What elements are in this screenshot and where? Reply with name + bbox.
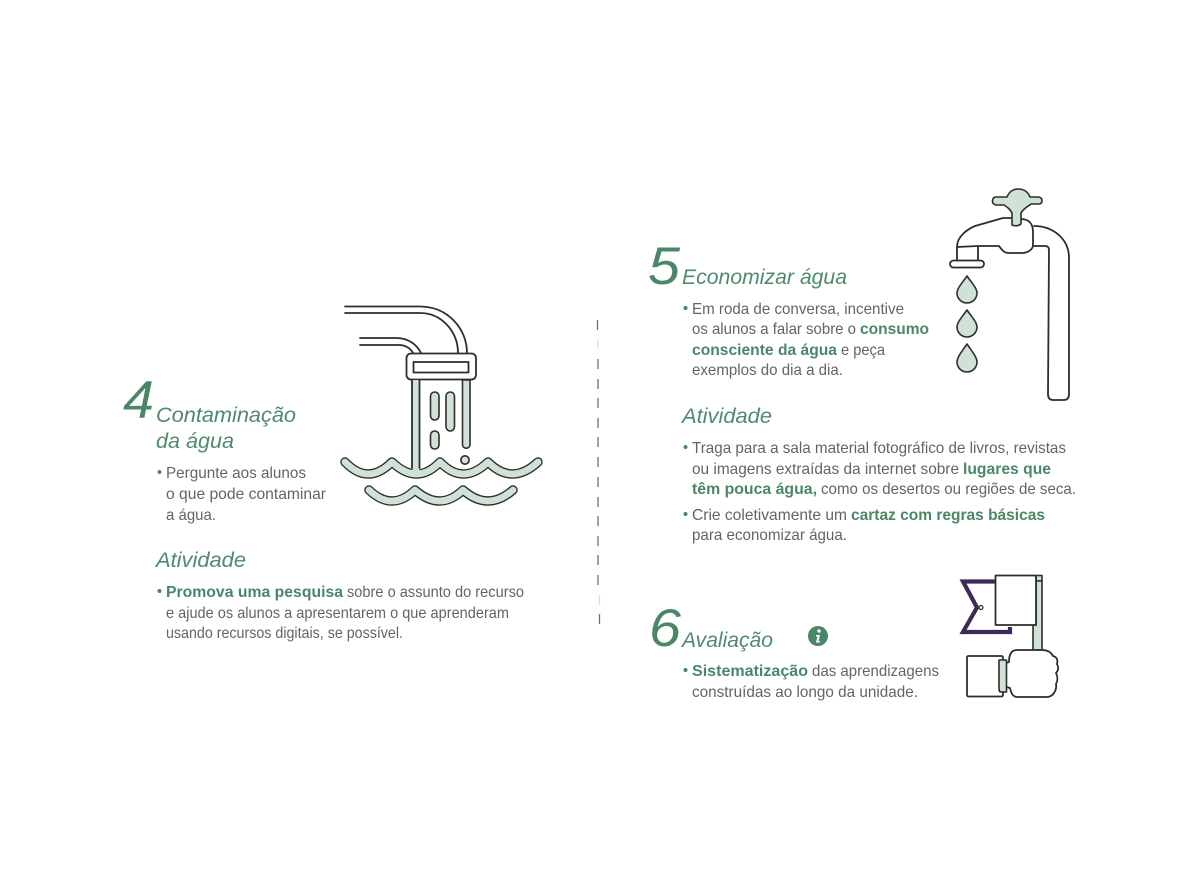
panel: section 4 water contamination: [123, 306, 538, 642]
panel: section 6 evaluation: [649, 576, 1058, 701]
text block: activity bullets: como os desertos ou regiões de seca.: [821, 481, 1076, 498]
text block: discussion bullet: consumo: [860, 321, 929, 338]
text block: activity bullets: Traga para a sala material fotográfico de livros, revistas: [692, 440, 1066, 457]
text block: discussion bullet: [684, 301, 929, 379]
text block: question bullet: a água.: [166, 507, 216, 524]
text block: activity bullet: usando recursos digitais, se possível.: [166, 625, 403, 642]
text block: discussion bullet: consciente da água: [692, 342, 837, 359]
icon: information: [808, 626, 828, 646]
text block: activity bullets: cartaz com regras básicas: [851, 507, 1045, 524]
heading: Atividade: Atividade: [154, 549, 246, 572]
heading: Contaminação da água: Contaminação: [156, 404, 296, 427]
text block: question bullet: o que pode contaminar: [166, 486, 327, 503]
text block: question bullet: [158, 465, 327, 524]
text block: activity bullets: para economizar água.: [692, 527, 847, 544]
text block: activity bullet: sobre o assunto do recurso: [347, 584, 524, 601]
text block: activity bullet: e ajude os alunos a apresentarem o que aprenderam: [166, 605, 509, 622]
number 6: 6: [649, 599, 682, 658]
text block: activity bullets: [684, 440, 1076, 544]
text block: activity bullet: [158, 584, 524, 642]
heading: Atividade: Atividade: [680, 405, 772, 428]
text block: discussion bullet: Em roda de conversa, incentive: [692, 301, 904, 318]
heading: Avaliação: Avaliação: [680, 629, 773, 652]
icon: hand holding flag: [963, 576, 1058, 697]
text block: activity bullet: Promova uma pesquisa: [166, 584, 343, 601]
text block: evaluation bullet: das aprendizagens: [812, 663, 939, 680]
text block: activity bullets: lugares que: [963, 461, 1051, 478]
text block: discussion bullet: e peça: [841, 342, 885, 359]
panel: section 5 saving water: [648, 189, 1076, 544]
number 4: 4: [123, 371, 154, 430]
icon: dripping faucet: [950, 189, 1069, 400]
icon: sewage pipe over water: [345, 306, 538, 501]
text block: activity bullets: ou imagens extraídas da internet sobre: [692, 461, 959, 478]
heading: Contaminação da água: da água: [156, 430, 234, 453]
heading: Economizar água: Economizar água: [682, 266, 847, 289]
text block: evaluation bullet: construídas ao longo da unidade.: [692, 684, 918, 701]
text block: evaluation bullet: [684, 663, 939, 701]
vertical dashed divider: [598, 320, 600, 624]
text block: activity bullets: Crie coletivamente um: [692, 507, 847, 524]
text block: discussion bullet: os alunos a falar sobre o: [692, 321, 856, 338]
heading: Contaminação da água: [156, 404, 296, 453]
text block: evaluation bullet: Sistematização: [692, 663, 808, 680]
number 5: 5: [648, 237, 681, 296]
text block: discussion bullet: exemplos do dia a dia.: [692, 362, 843, 379]
text block: question bullet: Pergunte aos alunos: [166, 465, 306, 482]
text block: activity bullets: têm pouca água,: [692, 481, 817, 498]
